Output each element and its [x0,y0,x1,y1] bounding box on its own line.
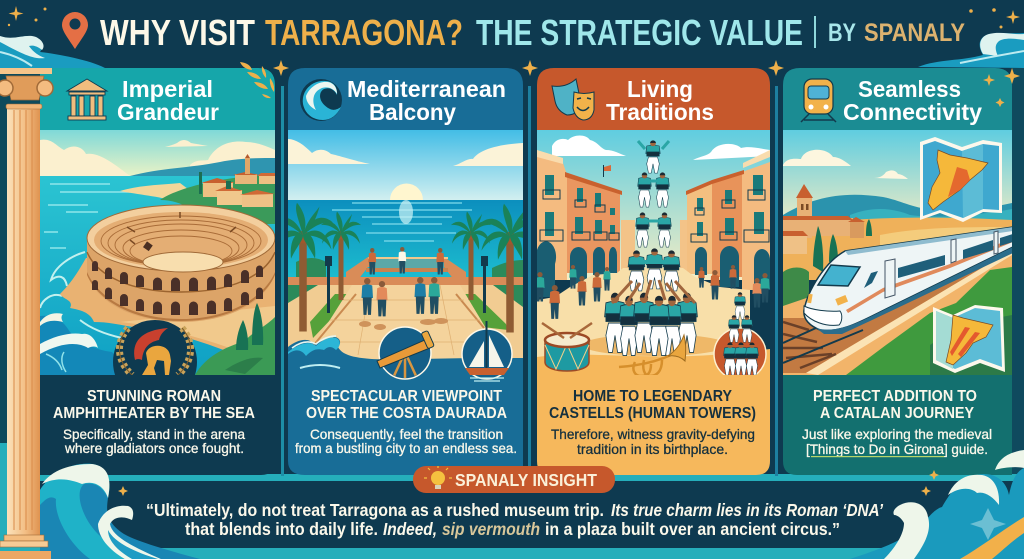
quote band [40,481,1024,548]
illustration: human tower [535,130,770,380]
balustrade [346,257,466,277]
sandy shore [60,258,275,356]
ground and bushes [783,255,1012,375]
hilltop town [199,154,275,207]
shore wave [288,337,523,375]
heading: Seamless [858,76,961,102]
right wave [850,450,1024,559]
onlookers [368,248,376,275]
panel header [40,68,275,130]
decoration: laurel and sparkles [240,60,1020,480]
left wave [40,464,200,559]
side wall [288,277,523,285]
quote: Indeed, [383,519,437,539]
quote: in a plaza built over an ancient circus.” [545,519,840,539]
description: Just like exploring the medieval [802,426,992,442]
column shaft [7,105,40,535]
quote: that blends into daily life. [185,519,378,539]
panel header [783,68,1012,130]
description: from a bustling city to an endless sea. [295,440,517,456]
map: lower [933,305,1005,373]
top-right wave [918,33,1024,68]
icon: temple [67,79,107,120]
description: Therefore, witness gravity-defying [551,426,755,442]
icon: telescope [377,327,434,379]
panel: mediterranean balcony [288,68,523,475]
walkers [362,278,373,315]
badge label: SPANALY INSIGHT [455,470,597,490]
description: Consequently, feel the transition [310,426,503,442]
palms [288,202,333,332]
mini tower medallion [714,292,766,380]
quote: “Ultimately, do not treat Tarragona as a rushed museum trip. [146,500,604,520]
description: tradition in its birthplace. [577,441,728,457]
statement: AMPHITHEATER BY THE SEA [53,405,255,422]
castell tower [605,140,697,356]
map: upper [920,137,1002,222]
heading: Living [627,76,693,102]
shrubs and cypress [195,317,275,375]
panel header [537,68,770,130]
icon: map pin [62,12,88,49]
illustration: amphitheater by the sea [40,130,275,375]
column base [0,535,51,559]
panel: seamless connectivity [783,68,1013,475]
heading: Traditions [606,99,714,125]
illustration: train through Catalonia [783,130,1013,375]
icon: gladiator helmet with laurels [113,320,197,375]
description: where gladiators once fought. [64,440,244,456]
icon: wave [300,79,342,121]
plaza ground [537,268,750,357]
heading: Mediterranean [347,76,506,102]
quote: Its true charm lies in its Roman ‘DNA’ [611,500,884,520]
statement: HOME TO LEGENDARY [573,388,732,405]
badge [413,466,615,493]
right buildings [680,220,687,275]
byline: SPANALY [864,19,965,47]
icon: sailboat [462,321,512,381]
text block [783,375,1012,475]
text block [40,375,275,475]
column [0,68,53,559]
statement: SPECTACULAR VIEWPOINT [311,388,502,405]
train [804,227,1013,331]
title text: THE STRATEGIC VALUE [476,12,803,53]
top-left wave [0,36,105,68]
decoration: top sparkles [8,6,1020,28]
quote: sip vermouth [442,519,540,539]
statement: A CATALAN JOURNEY [820,405,974,422]
header title [62,12,965,53]
bystanders [537,272,545,302]
title text: WHY VISIT [100,12,255,53]
statement: STUNNING ROMAN [87,388,221,405]
description: Specifically, stand in the arena [63,426,245,442]
callout: spanaly insight [40,466,1024,548]
illustration: viewpoint [288,130,523,375]
title text: TARRAGONA? [265,12,463,53]
statement: OVER THE COSTA DAURADA [306,405,507,422]
icon: theatre masks [552,79,594,120]
heading: Connectivity [843,99,982,125]
panel: imperial grandeur [40,68,275,475]
text block [537,375,770,475]
village with bell tower [783,184,872,308]
left buildings [621,220,635,275]
heading: Grandeur [117,99,219,125]
heading: Imperial [122,76,213,102]
panel: living traditions [535,68,770,475]
column capital [0,68,53,109]
byline: BY [828,19,856,47]
foam lines [40,252,122,338]
drum [542,323,592,371]
statement: PERFECT ADDITION TO [813,388,977,405]
icon: train [801,79,836,122]
crashing waves [40,316,115,375]
plaza [320,285,486,359]
dividers [281,86,284,476]
statement: CASTELLS (HUMAN TOWERS) [549,405,756,422]
text block [288,375,523,475]
colosseum [87,205,275,322]
lamps [325,256,488,313]
bottom insight backdrop [0,443,40,559]
heading: Balcony [369,99,456,125]
sparkles [118,486,931,496]
trumpet [619,355,671,376]
icon: light bulb [424,466,452,489]
panel header [288,68,523,130]
garden ground [288,285,523,358]
description: [Things to Do in Girona] guide. [806,441,988,457]
rails [783,322,836,368]
